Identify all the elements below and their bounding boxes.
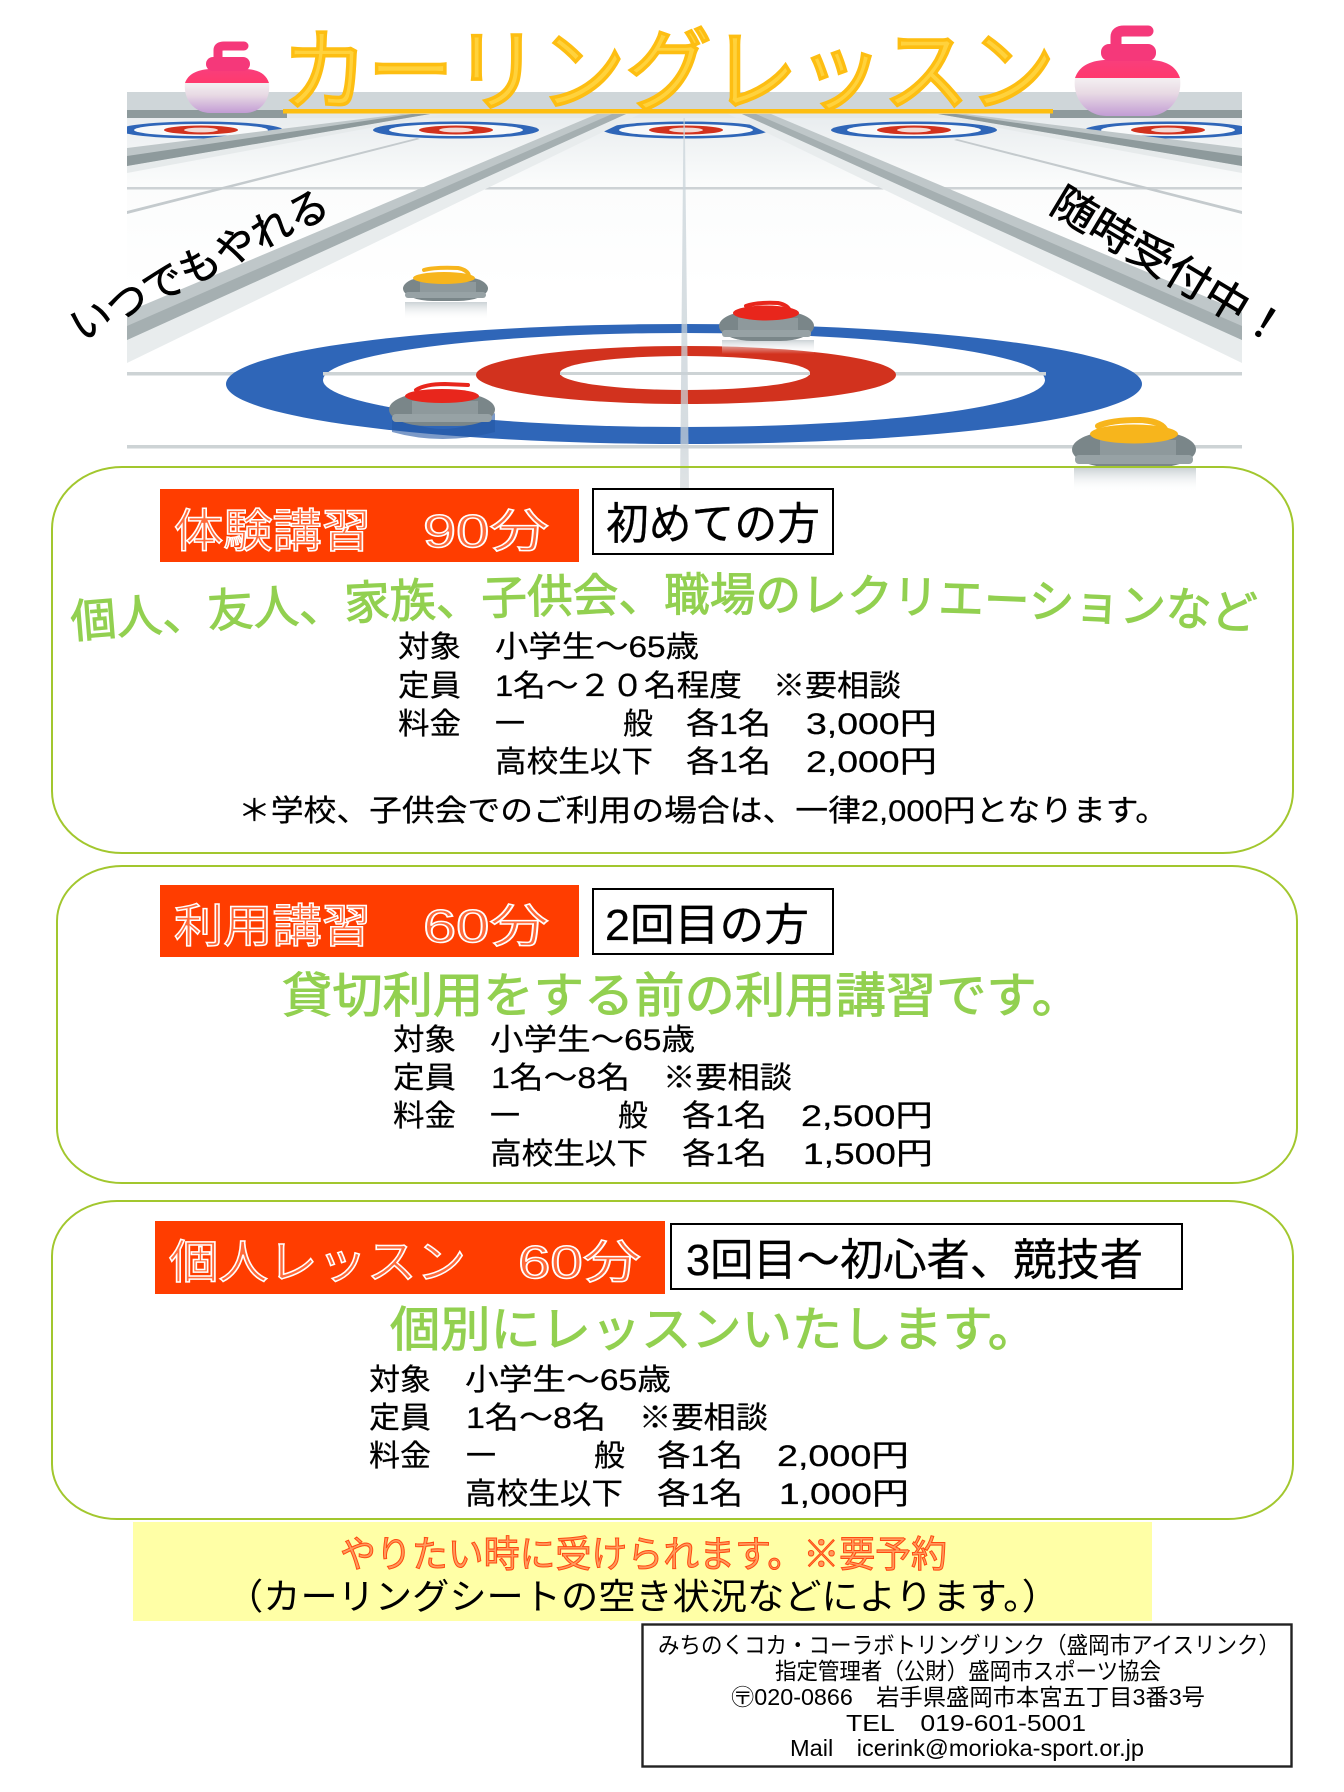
title: カーリングレッスン xyxy=(282,23,1055,123)
contact box: みちのくコカ・コーラボトリングリンク（盛岡市アイスリンク） xyxy=(658,1632,1280,1658)
details: 各1名 xyxy=(657,1440,743,1473)
details: ※要相談 xyxy=(773,670,901,703)
details: 高校生以下 xyxy=(495,746,653,779)
details: 般 xyxy=(623,708,653,741)
contact box xyxy=(642,1624,1292,1766)
audience box xyxy=(671,1224,1182,1289)
details: 高校生以下 xyxy=(465,1478,623,1511)
details: 一 xyxy=(490,1100,520,1133)
details: 2,500円 xyxy=(801,1100,933,1133)
audience box xyxy=(593,889,833,954)
details: 料金 xyxy=(393,1100,456,1133)
details: 各1名 xyxy=(682,1138,767,1171)
contact box: Mail icerink@morioka-sport.or.jp xyxy=(790,1735,1144,1761)
details: 小学生～65歳 xyxy=(465,1364,671,1397)
details: 料金 xyxy=(369,1440,431,1473)
centre line xyxy=(680,118,689,490)
audience box xyxy=(593,489,833,554)
stone: red near xyxy=(389,384,495,439)
contact box: 〶020-0866 岩手県盛岡市本宮五丁目3番3号 xyxy=(731,1684,1205,1710)
details: 料金 xyxy=(398,708,461,741)
distant house rings xyxy=(119,122,1251,138)
icon: pink curling stone left xyxy=(185,46,269,113)
main house rings xyxy=(226,324,1142,444)
heading badge: 60分 xyxy=(518,1236,641,1288)
details: 高校生以下 xyxy=(490,1138,648,1171)
details: 対象 xyxy=(369,1364,431,1397)
details: 対象 xyxy=(393,1024,456,1057)
details: 定員 xyxy=(369,1402,431,1435)
icon: pink curling stone right xyxy=(1075,31,1180,116)
details: 定員 xyxy=(393,1062,456,1095)
callout: reservation note: やりたい時に受けられます。※要予約 xyxy=(340,1534,947,1575)
details: 各1名 xyxy=(686,746,771,779)
heading badge xyxy=(155,1221,665,1294)
details: 般 xyxy=(618,1100,648,1133)
contact box: TEL 019-601-5001 xyxy=(846,1710,1086,1736)
details xyxy=(393,1024,933,1171)
green headline: 個別にレッスンいたします。 xyxy=(390,1304,1038,1357)
details: 小学生～65歳 xyxy=(490,1024,695,1057)
details: 1名～8名 xyxy=(491,1062,630,1095)
panel: private lesson xyxy=(52,1201,1293,1519)
heading badge: 個人レッスン xyxy=(169,1236,466,1288)
footnote: ＊学校、子供会でのご利用の場合は、一律2,000円となります。 xyxy=(238,795,1168,828)
panel: trial lesson xyxy=(51,466,1294,854)
audience box: 3回目～初心者、競技者 xyxy=(686,1236,1143,1285)
details: 対象 xyxy=(398,631,461,664)
heading badge xyxy=(160,885,579,957)
contact box: 指定管理者（公財）盛岡市スポーツ協会 xyxy=(775,1658,1161,1684)
stone: red middle xyxy=(719,303,814,354)
details: 1名～8名 xyxy=(466,1402,606,1435)
details xyxy=(369,1364,909,1511)
stone: yellow far xyxy=(403,268,488,320)
slanted text left: いつでもやれる xyxy=(63,181,337,350)
heading badge: 体験講習 xyxy=(174,505,371,557)
heading badge xyxy=(160,489,579,562)
heading badge: 60分 xyxy=(423,900,549,952)
heading badge: 90分 xyxy=(423,505,549,557)
rink illustration xyxy=(119,92,1251,492)
details: 1,500円 xyxy=(803,1138,933,1171)
callout: reservation note xyxy=(133,1522,1152,1621)
details: 各1名 xyxy=(657,1478,743,1511)
stone: yellow near xyxy=(1072,420,1196,492)
details: 2,000円 xyxy=(806,746,937,779)
audience box: 初めての方 xyxy=(606,500,820,549)
details: 一 xyxy=(466,1440,496,1473)
callout: reservation note: （カーリングシートの空き状況などによります。） xyxy=(226,1576,1059,1617)
details: 一 xyxy=(495,708,525,741)
details: ※要相談 xyxy=(663,1062,792,1095)
details: ※要相談 xyxy=(639,1402,768,1435)
details: 1,000円 xyxy=(779,1478,909,1511)
details: 定員 xyxy=(398,670,461,703)
details: 2,000円 xyxy=(777,1440,909,1473)
arched green headline: 個人、友人、家族、子供会、職場のレクリエーションなど xyxy=(70,572,1258,642)
details: 各1名 xyxy=(686,708,771,741)
details: 各1名 xyxy=(682,1100,767,1133)
lane dividers xyxy=(127,114,1242,363)
details xyxy=(398,631,937,779)
details: 3,000円 xyxy=(806,708,937,741)
slanted text right: 随時受付中！ xyxy=(1043,178,1296,355)
audience box: 2回目の方 xyxy=(605,901,809,950)
panel: usage lesson xyxy=(57,866,1297,1183)
details: 般 xyxy=(594,1440,625,1473)
details: 小学生～65歳 xyxy=(495,631,699,664)
heading badge: 利用講習 xyxy=(174,900,371,952)
details: 1名～２０名程度 xyxy=(495,670,742,703)
green headline: 貸切利用をする前の利用講習です。 xyxy=(282,970,1082,1023)
